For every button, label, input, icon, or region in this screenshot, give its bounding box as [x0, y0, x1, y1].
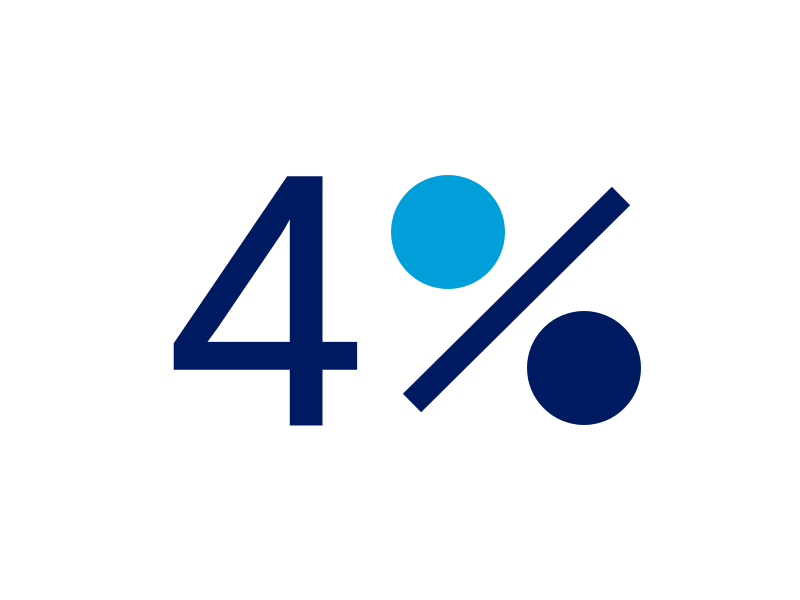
percent sign [391, 175, 641, 425]
numeral 4: 4 [167, 100, 366, 500]
icon: slash [412, 196, 621, 403]
icon: light blue circle [391, 175, 505, 289]
icon: dark circle [527, 311, 641, 425]
